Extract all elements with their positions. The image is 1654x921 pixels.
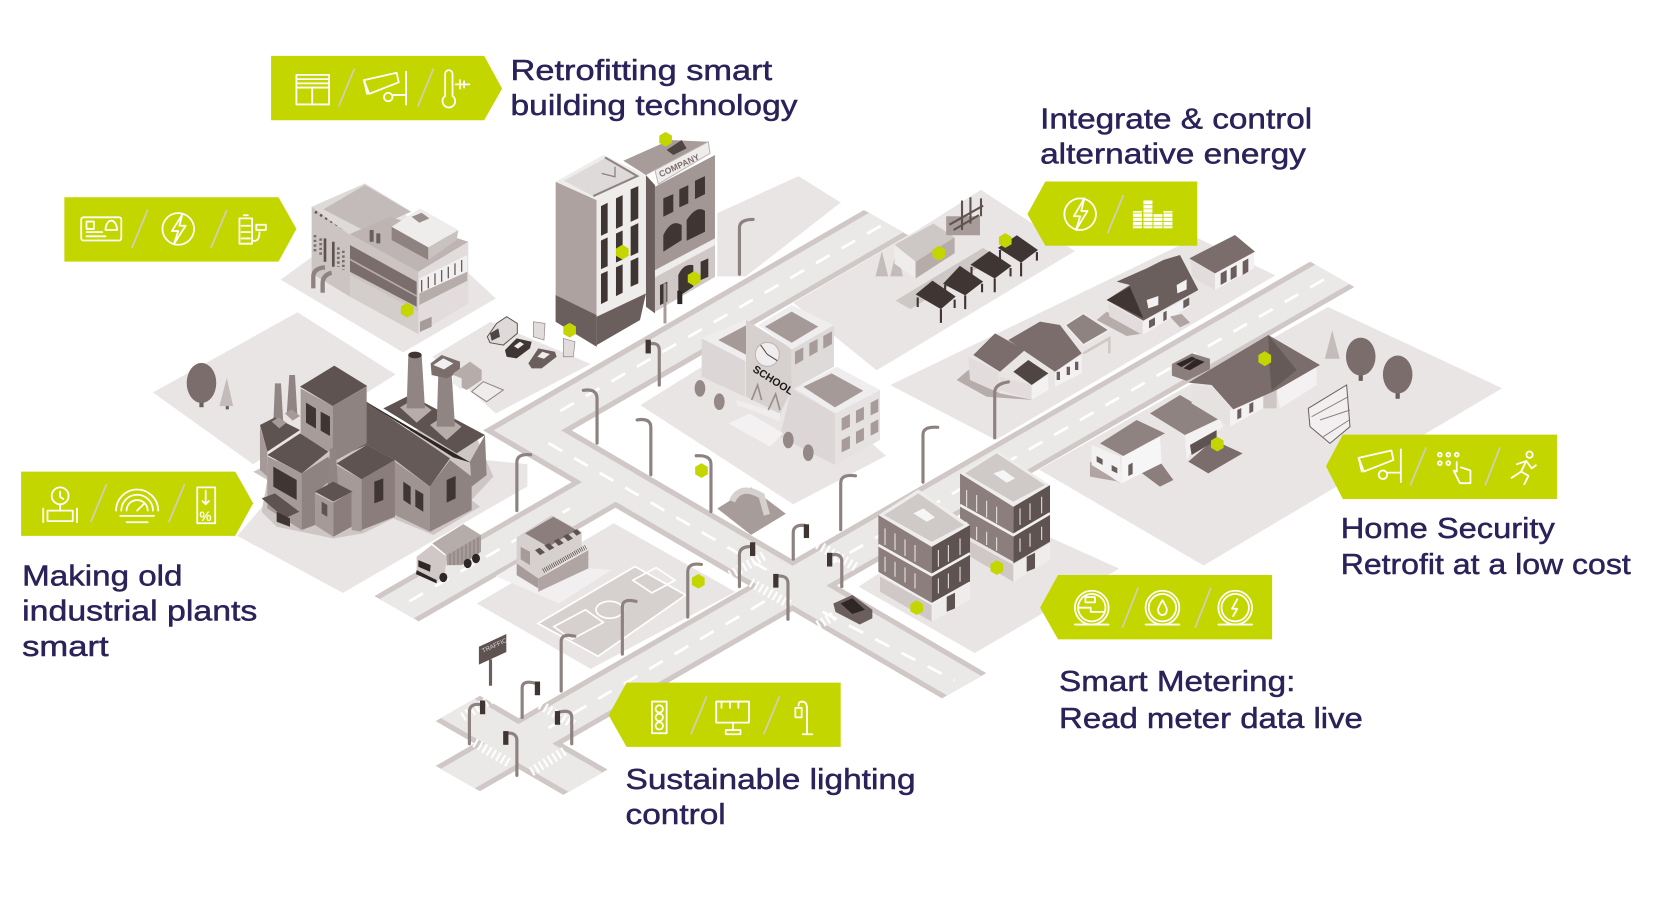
icon: running person <box>1512 452 1536 484</box>
banner: home security <box>1326 435 1557 499</box>
lamp by plot <box>739 219 753 274</box>
house 1 <box>1189 235 1255 290</box>
label: home security <box>1341 513 1631 581</box>
label: smart metering: Read meter data live <box>1059 703 1363 735</box>
label: industrial plants: Making old <box>22 561 182 593</box>
office building <box>312 183 468 334</box>
truck and kiosk <box>416 515 588 592</box>
lower houses and greenhouse <box>1090 335 1350 487</box>
icon: security camera <box>364 72 406 104</box>
tree plot trees <box>187 363 233 409</box>
icon: percent reduction <box>197 487 215 524</box>
label: alternative energy: alternative energy <box>1040 139 1307 171</box>
icon: dial with flow lines <box>116 490 158 522</box>
icon: water meter <box>1146 591 1179 625</box>
label: industrial plants: industrial plants <box>22 595 257 627</box>
traffic billboard <box>479 634 509 686</box>
label: home security: Home Security <box>1341 513 1556 545</box>
city ground plots <box>153 176 1502 669</box>
road network <box>374 210 1354 795</box>
label: retrofitting: Retrofitting smart <box>511 55 772 87</box>
icon: bolt in circle <box>162 213 194 245</box>
icon: security camera <box>1359 449 1401 482</box>
cars on streets <box>833 353 1210 625</box>
street lamps and traffic lights <box>469 340 938 775</box>
house 2 <box>1097 255 1198 336</box>
banner: industrial plants <box>21 472 253 536</box>
icon: pipe gauge <box>43 487 77 522</box>
soccer field <box>538 567 686 656</box>
parked vehicles and chargers <box>487 317 575 368</box>
factory and its vehicles <box>253 352 503 538</box>
banner: energy access <box>64 197 296 262</box>
house 3 <box>957 313 1109 400</box>
traffic billboard: TRAFFIC <box>481 637 509 655</box>
banner: sustainable lighting <box>609 683 841 747</box>
market kiosk <box>517 515 588 592</box>
lower right apartment <box>960 450 1050 582</box>
lower houses trees <box>1325 330 1412 399</box>
houses on upper street <box>957 235 1255 400</box>
label: industrial plants <box>22 561 257 663</box>
label: industrial plants: smart <box>22 631 109 663</box>
icon: electricity meter <box>1218 591 1252 625</box>
bus stop <box>717 487 786 535</box>
school <box>695 305 880 465</box>
icon: ID card <box>81 217 121 241</box>
label: retrofitting <box>511 55 798 122</box>
label: smart metering <box>1059 666 1363 735</box>
school sign text: SCHOOL <box>750 363 796 398</box>
label: sustainable lighting: control <box>626 799 726 831</box>
sensor marker dots <box>401 132 1271 615</box>
icon: billboard <box>716 702 749 734</box>
banner: retrofitting building <box>271 56 502 120</box>
icon: street lamp <box>795 702 812 734</box>
lower left apartment <box>878 489 970 622</box>
icon: battery and plug <box>239 215 266 244</box>
label: sustainable lighting <box>626 764 916 831</box>
solar panels <box>916 235 1038 323</box>
icon: traffic light <box>652 702 667 733</box>
banner: alternative energy <box>1027 181 1197 246</box>
label: sustainable lighting: Sustainable lighting <box>626 764 916 796</box>
label: home security: Retrofit at a low cost <box>1341 549 1631 581</box>
icon: bolt in circle <box>1064 198 1096 230</box>
icon: percent reduction: % <box>199 509 212 524</box>
lamp in houses plot <box>995 382 1008 438</box>
label: alternative energy: Integrate & control <box>1040 104 1312 136</box>
plate under kiosk <box>496 563 612 603</box>
label: retrofitting: building technology <box>511 90 798 122</box>
truck <box>416 524 481 583</box>
power station and trees <box>876 197 997 309</box>
label: smart metering: Smart Metering: <box>1059 666 1295 698</box>
icon: energy bars <box>1132 200 1174 228</box>
icon: gas meter <box>1075 591 1109 625</box>
icon: thermometer <box>443 70 469 107</box>
label: alternative energy <box>1040 104 1312 171</box>
company sign text: COMPANY <box>657 152 701 179</box>
icon: window shutter <box>296 75 329 104</box>
tall office block <box>556 140 715 347</box>
icon: keypad touch <box>1438 453 1470 483</box>
banner: smart metering <box>1040 575 1272 639</box>
